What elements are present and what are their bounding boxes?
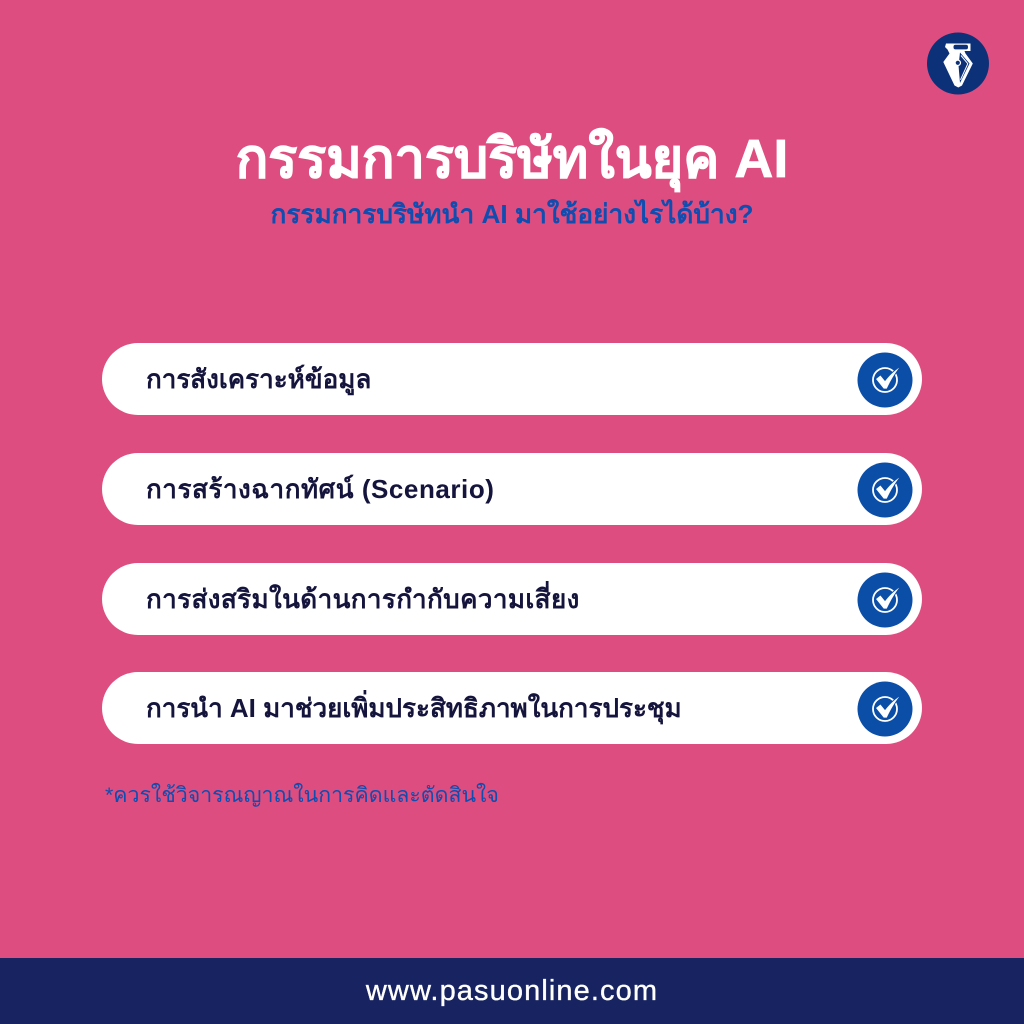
icon: pen nib logo xyxy=(927,32,989,94)
footnote: *ควรใช้วิจารณญาณในการคิดและตัดสินใจ xyxy=(105,783,499,807)
panel: item 1 xyxy=(102,343,922,415)
footer bar xyxy=(0,958,1024,1024)
item text: การนำ AI มาช่วยเพิ่มประสิทธิภาพในการประชุม xyxy=(146,693,682,723)
panel: item 4 xyxy=(102,672,922,744)
icon: check badge xyxy=(858,462,912,518)
website url: www.pasuonline.com xyxy=(366,975,658,1007)
icon: check badge xyxy=(858,682,912,736)
item text: การสร้างฉากทัศน์ (Scenario) xyxy=(146,474,494,504)
panel: item 3 xyxy=(102,563,922,635)
panel: item 2 xyxy=(102,453,922,525)
icon: check badge xyxy=(858,352,912,408)
subtitle: กรรมการบริษัทนำ AI มาใช้อย่างไรได้บ้าง? xyxy=(270,199,754,229)
icon: check badge xyxy=(858,572,912,628)
item text: การส่งสริมในด้านการกำกับความเสี่ยง xyxy=(146,584,580,614)
title: กรรมการบริษัทในยุค AI xyxy=(236,129,788,189)
item text: การสังเคราะห์ข้อมูล xyxy=(146,364,371,394)
